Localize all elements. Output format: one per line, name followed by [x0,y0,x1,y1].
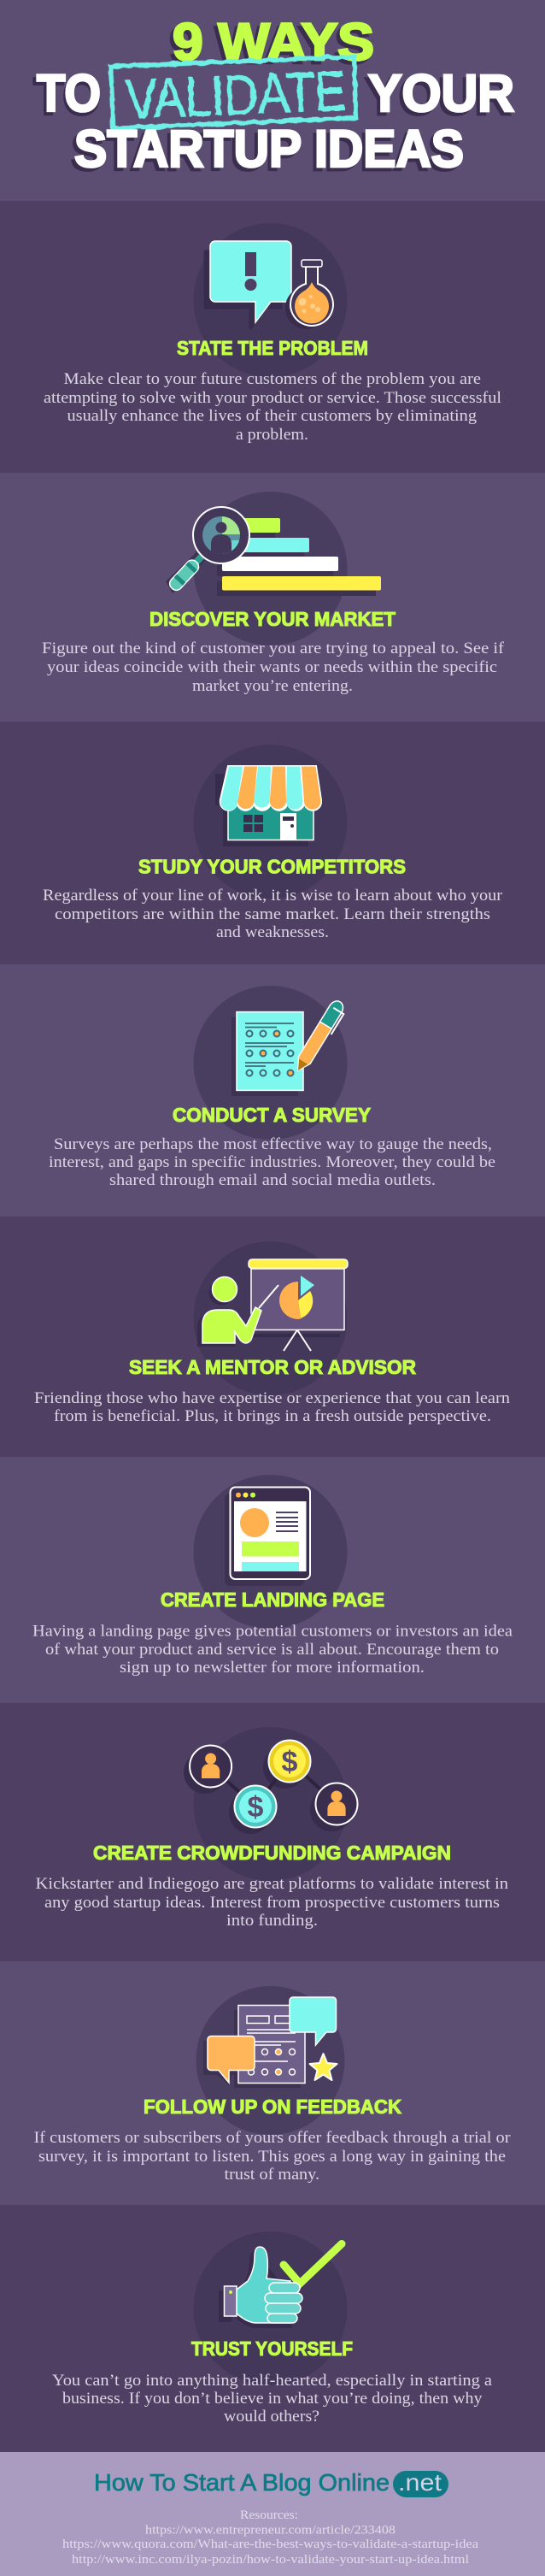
icon: crowdfunding network: $ [282,1746,298,1778]
heading: DISCOVER YOUR MARKET [149,608,396,630]
resources: Resources: [240,2508,298,2522]
text block: business. If you don’t believe in what you’re doing, then why [62,2390,483,2408]
panel: create crowdfunding campaign [0,1703,545,1961]
title: to: TO [37,64,101,122]
text block [42,640,505,695]
panel: study your competitors [0,722,545,964]
text block [36,1875,509,1930]
resources: https://www.quora.com/What-are-the-best-ways-to-validate-a-startup-idea [62,2538,478,2551]
panel: footer [0,2452,545,2576]
title: 9 ways: 9 WAYS [169,16,371,74]
text block: competitors are within the same market. Learn their strengths [55,905,490,923]
icon: thumbs up and check mark [219,2243,342,2328]
text block [34,1389,511,1425]
text block: Kickstarter and Indiegogo are great platforms to validate interest in [36,1875,509,1893]
text block: attempting to solve with your product or service. Those successful [44,389,501,407]
text block [44,370,501,444]
heading: CONDUCT A SURVEY [173,1104,371,1126]
title: startup ideas: STARTUP IDEAS [74,120,464,178]
text block: your ideas coincide with their wants or needs within the specific [47,658,497,676]
text block [49,1135,495,1189]
panel: conduct a survey [0,964,545,1217]
panel: state the problem [0,201,545,473]
text block: Surveys are perhaps the most effective way to gauge the needs, [54,1135,492,1153]
text block: and weaknesses. [216,923,329,941]
icon: storefront [215,766,321,846]
icon: crowdfunding network: $ [248,1791,264,1824]
heading: FOLLOW UP ON FEEDBACK [144,2096,401,2118]
text block: usually enhance the lives of their customers by eliminating [67,407,478,425]
heading: TRUST YOURSELF [191,2337,353,2360]
text block: trust of many. [224,2166,319,2184]
icon: survey form and pen [231,999,348,1096]
text block: from is beneficial. Plus, it brings in a fresh outside perspective. [54,1407,491,1425]
text block: Regardless of your line of work, it is wise to learn about who your [43,887,503,905]
panel: trust yourself [0,2205,545,2452]
logo: How To Start A Blog Online [94,2469,390,2496]
text block: If customers or subscribers of yours offer feedback through a trial or [34,2129,511,2147]
icon: magnifier and bars [166,507,381,596]
title: validate stamp: VALIDATE [125,59,348,131]
icon: crowdfunding network [184,1741,357,1834]
text block: shared through email and social media outlets. [109,1171,436,1189]
panel: follow up on feedback [0,1961,545,2205]
header panel [0,0,545,201]
text block: any good startup ideas. Interest from prospective customers turns [44,1894,500,1912]
heading: STATE THE PROBLEM [177,337,368,359]
text block: would others? [224,2408,319,2426]
panel: create landing page [0,1457,545,1703]
text block: interest, and gaps in specific industries. Moreover, they could be [49,1153,495,1171]
panel: discover your market [0,473,545,722]
heading: CREATE LANDING PAGE [161,1589,384,1611]
heading: SEEK A MENTOR OR ADVISOR [129,1356,416,1378]
resources: https://www.entrepreneur.com/article/233408 [145,2524,396,2538]
text block [43,887,503,941]
text block: Friending those who have expertise or experience that you can learn [34,1389,511,1407]
title: 9 ways: 9 WAYS [173,13,374,71]
text block: Figure out the kind of customer you are trying to appeal to. See if [42,640,505,657]
text block: You can’t go into anything half-hearted, especially in starting a [52,2372,493,2390]
title: your: YOUR [365,68,511,126]
title: your: YOUR [368,64,514,122]
resources: http://www.inc.com/ilya-pozin/how-to-validate-your-start-up-idea.html [72,2553,469,2567]
text block: Make clear to your future customers of the problem you are [63,370,481,388]
text block: Having a landing page gives potential customers or investors an idea [32,1623,513,1640]
title: startup ideas: STARTUP IDEAS [71,123,460,181]
heading: STUDY YOUR COMPETITORS [138,855,406,877]
text block: sign up to newsletter for more information. [120,1659,425,1677]
text block [52,2372,493,2426]
text block: market you’re entering. [192,677,353,695]
logo: .net [398,2469,442,2496]
icon: feedback form and speech bubbles [203,1997,337,2088]
text block [32,1623,513,1677]
text block: of what your product and service is all about. Encourage them to [45,1641,499,1659]
text block [34,2129,511,2184]
panel: seek a mentor or advisor [0,1217,545,1457]
icon: mentor at presentation board [197,1259,348,1351]
text block: a problem. [236,426,308,444]
text block: survey, it is important to listen. This goes a long way in gaining the [38,2148,506,2166]
icon: landing page window [225,1488,310,1586]
heading: CREATE CROWDFUNDING CAMPAIGN [93,1842,451,1864]
icon: speech bubble and flask [205,241,333,329]
text block: into funding. [226,1912,318,1930]
resources [62,2508,478,2567]
title: to: TO [33,68,101,126]
